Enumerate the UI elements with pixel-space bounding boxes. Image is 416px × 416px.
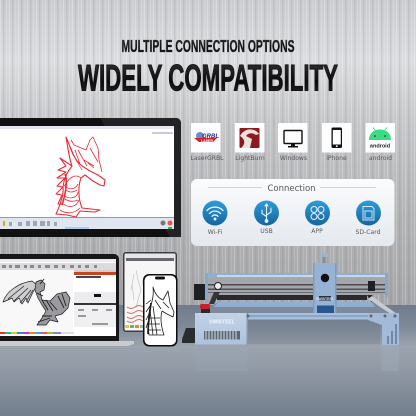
LaserGRBL logo: GRBL <box>202 134 219 140</box>
control box <box>195 313 248 344</box>
blue sticker <box>317 306 334 313</box>
connection panel <box>191 179 394 246</box>
monitor icon <box>284 130 302 148</box>
label: Windows <box>280 155 307 162</box>
wifi icon <box>207 207 223 220</box>
frame top rail <box>205 273 388 278</box>
tile: iPhone <box>322 123 352 162</box>
background wall <box>0 0 416 306</box>
smartphone with black dragon <box>143 274 178 346</box>
label: LightBurn <box>235 155 265 162</box>
phone icon <box>332 128 342 148</box>
item: SD-Card <box>355 200 381 236</box>
tablet colour palette <box>125 325 144 328</box>
label: APP <box>311 228 323 235</box>
front rail <box>246 313 382 320</box>
tile: LaserGRBL <box>190 123 224 162</box>
tablet dragon sketch <box>127 270 146 322</box>
item: APP <box>305 200 330 235</box>
app icon <box>311 206 324 220</box>
red dragon drawing <box>56 137 105 217</box>
phone notch <box>155 276 165 280</box>
signal bars <box>387 324 397 344</box>
android logo: android <box>370 144 390 150</box>
tile: android <box>366 123 395 162</box>
item: USB <box>254 200 279 235</box>
phone screen <box>144 276 176 345</box>
label: Wi-Fi <box>208 229 223 236</box>
laptop toolbars <box>0 259 116 334</box>
panel heading: Connection <box>267 184 316 194</box>
gantry carriage <box>313 253 336 313</box>
software toolbars <box>0 126 174 229</box>
gantry rails and drag chain <box>206 278 385 305</box>
machine floor reflection <box>196 320 399 371</box>
laptop <box>0 254 134 346</box>
monitor screen <box>0 126 174 229</box>
item: Wi-Fi <box>202 200 228 236</box>
LaserGRBL logo: LASER <box>201 139 213 143</box>
background floor <box>0 305 416 416</box>
label: SD-Card <box>355 229 381 236</box>
laptop screen <box>0 259 116 336</box>
brand plate: SWISTEEL <box>316 297 335 301</box>
tablet toolbar <box>125 254 175 261</box>
dial gauge <box>214 282 222 290</box>
usb icon <box>262 204 271 222</box>
tile: LightBurn <box>235 123 265 162</box>
right leg <box>368 313 399 345</box>
phone dragon drawing <box>146 287 174 335</box>
frame bolts <box>246 314 396 318</box>
label: LaserGRBL <box>190 155 224 162</box>
stepper motor <box>194 284 205 300</box>
laser engraver machine <box>182 253 399 371</box>
box brand: SWISTEEL <box>209 320 235 326</box>
tablet screen <box>124 254 176 330</box>
label: USB <box>260 228 273 235</box>
cable connector <box>182 328 196 343</box>
LightBurn logo <box>240 128 260 148</box>
label: iPhone <box>326 155 347 162</box>
tablet <box>123 252 177 332</box>
work bed frame <box>200 302 392 313</box>
software tiles row <box>190 123 395 162</box>
laptop base <box>0 341 134 346</box>
black ink dragon on laptop <box>3 279 70 325</box>
red emergency stop button <box>200 304 210 313</box>
monitor with red dragon <box>0 118 181 237</box>
LaserGRBL logo <box>194 132 219 143</box>
vent <box>204 331 240 340</box>
sd card icon <box>363 206 374 220</box>
frame side rails <box>205 273 388 303</box>
tile: Windows <box>278 123 308 162</box>
heading: subtitle: MULTIPLE CONNECTION OPTIONS <box>122 36 294 56</box>
label: android <box>369 155 392 162</box>
focus knob <box>321 274 329 282</box>
